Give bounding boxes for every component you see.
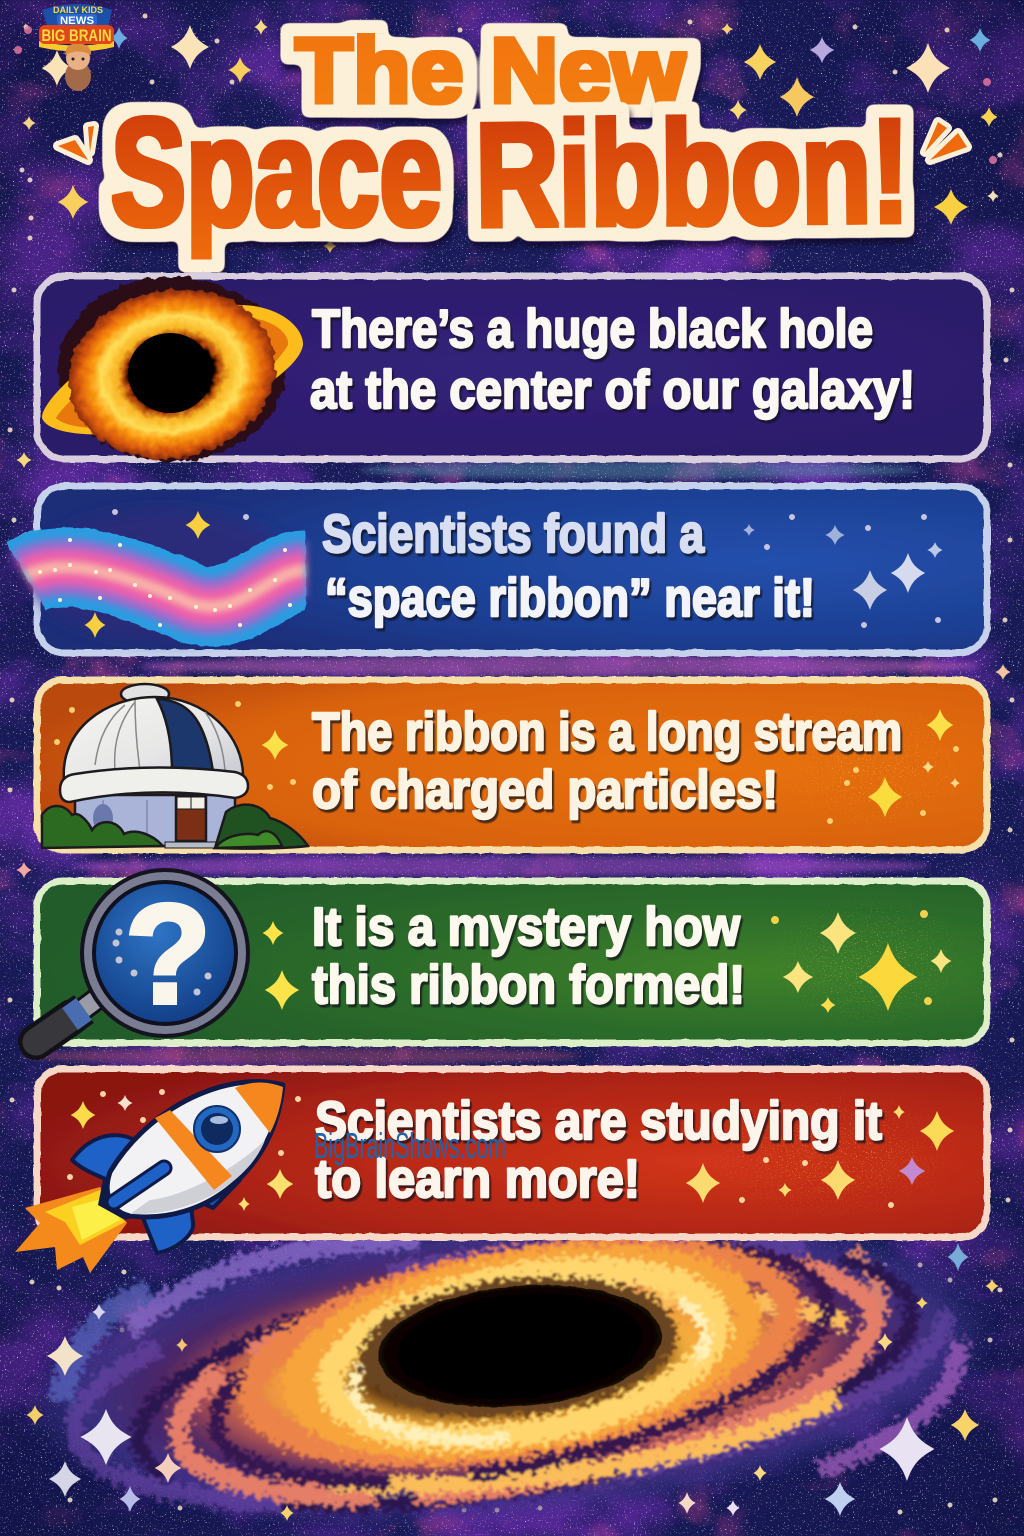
panel 2 text: “space ribbon” near it! (325, 568, 815, 628)
title line: Space Ribbon!: Ribbon! (475, 89, 910, 258)
panel 4 text: It is a mystery how (312, 897, 741, 957)
panel 5 text: Scientists are studying it (315, 1091, 882, 1151)
panel 1 text (310, 299, 915, 420)
title line: The New: The New (295, 20, 685, 122)
panel 1: black hole (37, 270, 987, 478)
icon: observatory (42, 684, 308, 849)
panel 2 text: Scientists found a (322, 504, 705, 564)
panel 4 decorative stars (263, 912, 951, 1013)
watermark: BigBrainShows.com (314, 1125, 506, 1166)
panel 2 text (322, 504, 815, 628)
rocket body (107, 1082, 283, 1217)
panel 4 text (312, 897, 745, 1015)
panel 3 text (312, 702, 902, 820)
panel 3: observatory (37, 680, 987, 850)
logo: Daily Kids News Big Brain (39, 4, 114, 91)
panel 5 text: to learn more! (315, 1149, 640, 1209)
panel 4 glitter (766, 894, 974, 1032)
title (58, 20, 967, 258)
panel 3 text: of charged particles! (312, 760, 778, 820)
panel 5 decorative stars (70, 1092, 954, 1211)
icon: magnifying glass (36, 868, 250, 1042)
rocket flame (15, 1187, 127, 1273)
title line: Space Ribbon! (111, 86, 910, 258)
icon: space ribbon (26, 510, 306, 640)
logo: Daily Kids News Big Brain: BIG BRAIN (42, 26, 112, 45)
panel 5 glitter (700, 1090, 959, 1220)
panel 3 decorative stars (57, 704, 960, 821)
icon: magnifying glass: ? (125, 875, 211, 1034)
icon: rocket (15, 1082, 283, 1273)
logo: Daily Kids News Big Brain: DAILY KIDS (53, 5, 103, 16)
logo: Daily Kids News Big Brain: NEWS (60, 15, 94, 27)
panel 2: space ribbon (26, 486, 987, 653)
sparkle stars: header area (16, 19, 1011, 878)
sparkle stars: galaxy area (26, 1243, 999, 1521)
panel 3 glitter (781, 702, 970, 833)
galaxy with black hole at bottom (9, 1176, 1011, 1536)
panel 5 text (315, 1091, 882, 1209)
title burst accents (58, 122, 967, 160)
icon: black hole (42, 270, 303, 478)
panel 3 text: The ribbon is a long stream (312, 702, 902, 762)
panel 4: mystery (36, 868, 987, 1043)
title line: Space Ribbon!: Space (111, 86, 442, 258)
panel 1 text: There’s a huge black hole (312, 299, 873, 359)
panel 5: scientists studying (15, 1069, 987, 1273)
panel 2 decorative stars (85, 511, 943, 638)
panel 4 text: this ribbon formed! (312, 955, 745, 1015)
panel 1 text: at the center of our galaxy! (310, 360, 915, 420)
